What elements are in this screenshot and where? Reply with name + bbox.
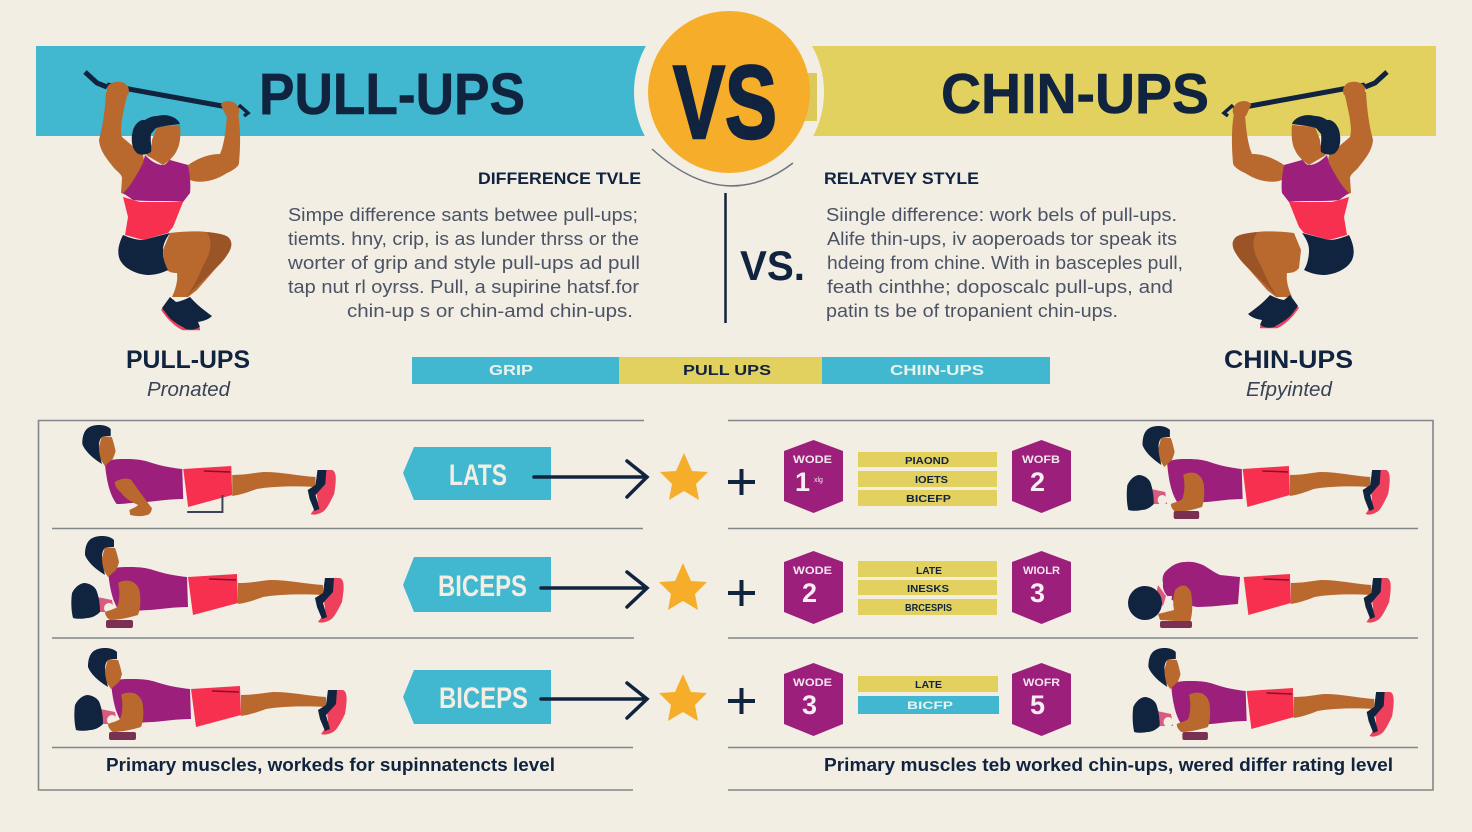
heading: difference: DIFFERENCE TVLE [478, 169, 641, 188]
stacked muscle bars row 2 [858, 561, 997, 615]
plus [728, 688, 755, 714]
plus [728, 580, 755, 606]
muscle bars row 3: BICFP [907, 700, 953, 712]
badge: right row 2: WIOLR [1023, 565, 1060, 577]
text block: pull-ups description: tiemts. hny, crip, is as lunder thrss or the [288, 229, 639, 249]
tag: lats [403, 447, 551, 500]
label: pull-ups pronated: Pronated [147, 379, 231, 401]
figure: chin-up plank row 1 [1127, 426, 1390, 519]
banner: pull-ups [36, 46, 656, 136]
VS badge [634, 0, 824, 187]
badge: right row 1 [1012, 440, 1071, 513]
comparison table frame [38, 420, 1433, 790]
figure: pull-up plank row 2 [71, 536, 344, 628]
arrow [541, 572, 647, 607]
figure: chin-up plank row 3 [1133, 648, 1394, 740]
figure: chin-up plank row 2 [1128, 562, 1391, 628]
grip comparison bar: PULL UPS [683, 362, 771, 379]
arrow [541, 683, 647, 718]
text block: pull-ups description [287, 205, 640, 321]
text block: chin-ups description: patin ts be of tropanient chin-ups. [826, 301, 1118, 321]
badge: right row 3 [1012, 663, 1071, 736]
label: chin-ups [1224, 346, 1353, 401]
text block: pull-ups description: Simpe difference sants betwee pull-ups; [288, 205, 638, 225]
badge: right row 1: 2 [1030, 467, 1045, 497]
stacked muscle bars row 1: BICEFP [906, 493, 951, 505]
label: pull-ups pronated [126, 346, 250, 401]
label: chin-ups: Efpyinted [1246, 379, 1333, 401]
footer note: chin-ups: Primary muscles teb worked chin-ups, wered differ rating level [824, 755, 1393, 775]
stacked muscle bars row 1 [858, 452, 997, 506]
badge: right row 1: WOFB [1022, 454, 1060, 466]
tag: biceps [403, 670, 551, 724]
text block: pull-ups description: worter of grip and style pull-ups ad pull [287, 253, 640, 273]
star [659, 674, 707, 721]
row 2: biceps [71, 536, 1391, 628]
muscle bars row 3 [858, 676, 999, 714]
badge: left row 2: 2 [802, 578, 817, 608]
badge: left row 1: xlg [814, 477, 823, 484]
grip comparison bar: CHIIN-UPS [890, 362, 984, 379]
text block: chin-ups description: Alife thin-ups, iv aoperoads tor speak its [827, 229, 1177, 249]
grip comparison bar [412, 357, 1050, 384]
banner: chin-ups [800, 46, 1436, 136]
label: chin-ups: CHIN-UPS [1224, 346, 1353, 374]
star [659, 563, 707, 610]
VS badge: VS [673, 45, 777, 161]
badge: right row 3: 5 [1030, 690, 1045, 720]
arrow [534, 461, 647, 497]
stacked muscle bars row 2: LATE [916, 565, 942, 577]
stacked muscle bars row 2: BRCESPIS [905, 602, 952, 614]
center divider with VS. [726, 193, 805, 323]
badge: left row 3 [784, 663, 843, 736]
banner: chin-ups: CHIN-UPS [941, 62, 1209, 126]
text block: chin-ups description [826, 205, 1183, 321]
tag: biceps [403, 557, 551, 612]
row 3: biceps [74, 648, 1394, 740]
stacked muscle bars row 1: PIAOND [905, 455, 949, 467]
text block: chin-ups description: Siingle difference: work bels of pull-ups. [826, 205, 1177, 225]
row 1: lats [82, 425, 1390, 519]
muscle bars row 3: LATE [915, 679, 942, 691]
tag: biceps: BICEPS [438, 570, 527, 603]
badge: left row 3: 3 [802, 690, 817, 720]
stacked muscle bars row 2: INESKS [907, 583, 949, 595]
center divider with VS.: VS. [740, 242, 805, 289]
badge: left row 2 [784, 551, 843, 624]
badge: left row 3: WODE [793, 677, 832, 689]
badge: right row 2: 3 [1030, 578, 1045, 608]
badge: left row 1 [784, 440, 843, 513]
tag: lats: LATS [449, 459, 507, 492]
badge: left row 2: WODE [793, 565, 832, 577]
tag: biceps: BICEPS [439, 682, 528, 715]
figure: pull-up plank row 1 [82, 425, 336, 516]
badge: right row 2 [1012, 551, 1071, 624]
heading: relative style: RELATVEY STYLE [824, 169, 979, 188]
star [660, 453, 708, 500]
text block: chin-ups description: feath cinthhe; doposcalc pull-ups, and [827, 277, 1173, 297]
footer note: pull-ups: Primary muscles, workeds for supinnatencts level [106, 755, 555, 775]
text block: pull-ups description: chin-up s or chin-amd chin-ups. [347, 301, 633, 321]
badge: left row 1: WODE [793, 454, 832, 466]
grip comparison bar: GRIP [489, 362, 533, 379]
plus [728, 469, 755, 495]
badge: left row 1: 1 [795, 467, 810, 497]
stacked muscle bars row 1: IOETS [915, 474, 948, 486]
figure: chin-up athlete [1224, 72, 1387, 328]
text block: pull-ups description: tap nut rl oyrss. Pull, a supirine hatsf.for [288, 277, 639, 297]
figure: pull-up plank row 3 [74, 648, 347, 740]
badge: right row 3: WOFR [1023, 677, 1060, 689]
banner: pull-ups: PULL-UPS [259, 62, 525, 127]
label: pull-ups pronated: PULL-UPS [126, 346, 250, 374]
text block: chin-ups description: hdeing from chine. With in basceples pull, [827, 253, 1183, 273]
figure: pull-up athlete [85, 72, 248, 330]
